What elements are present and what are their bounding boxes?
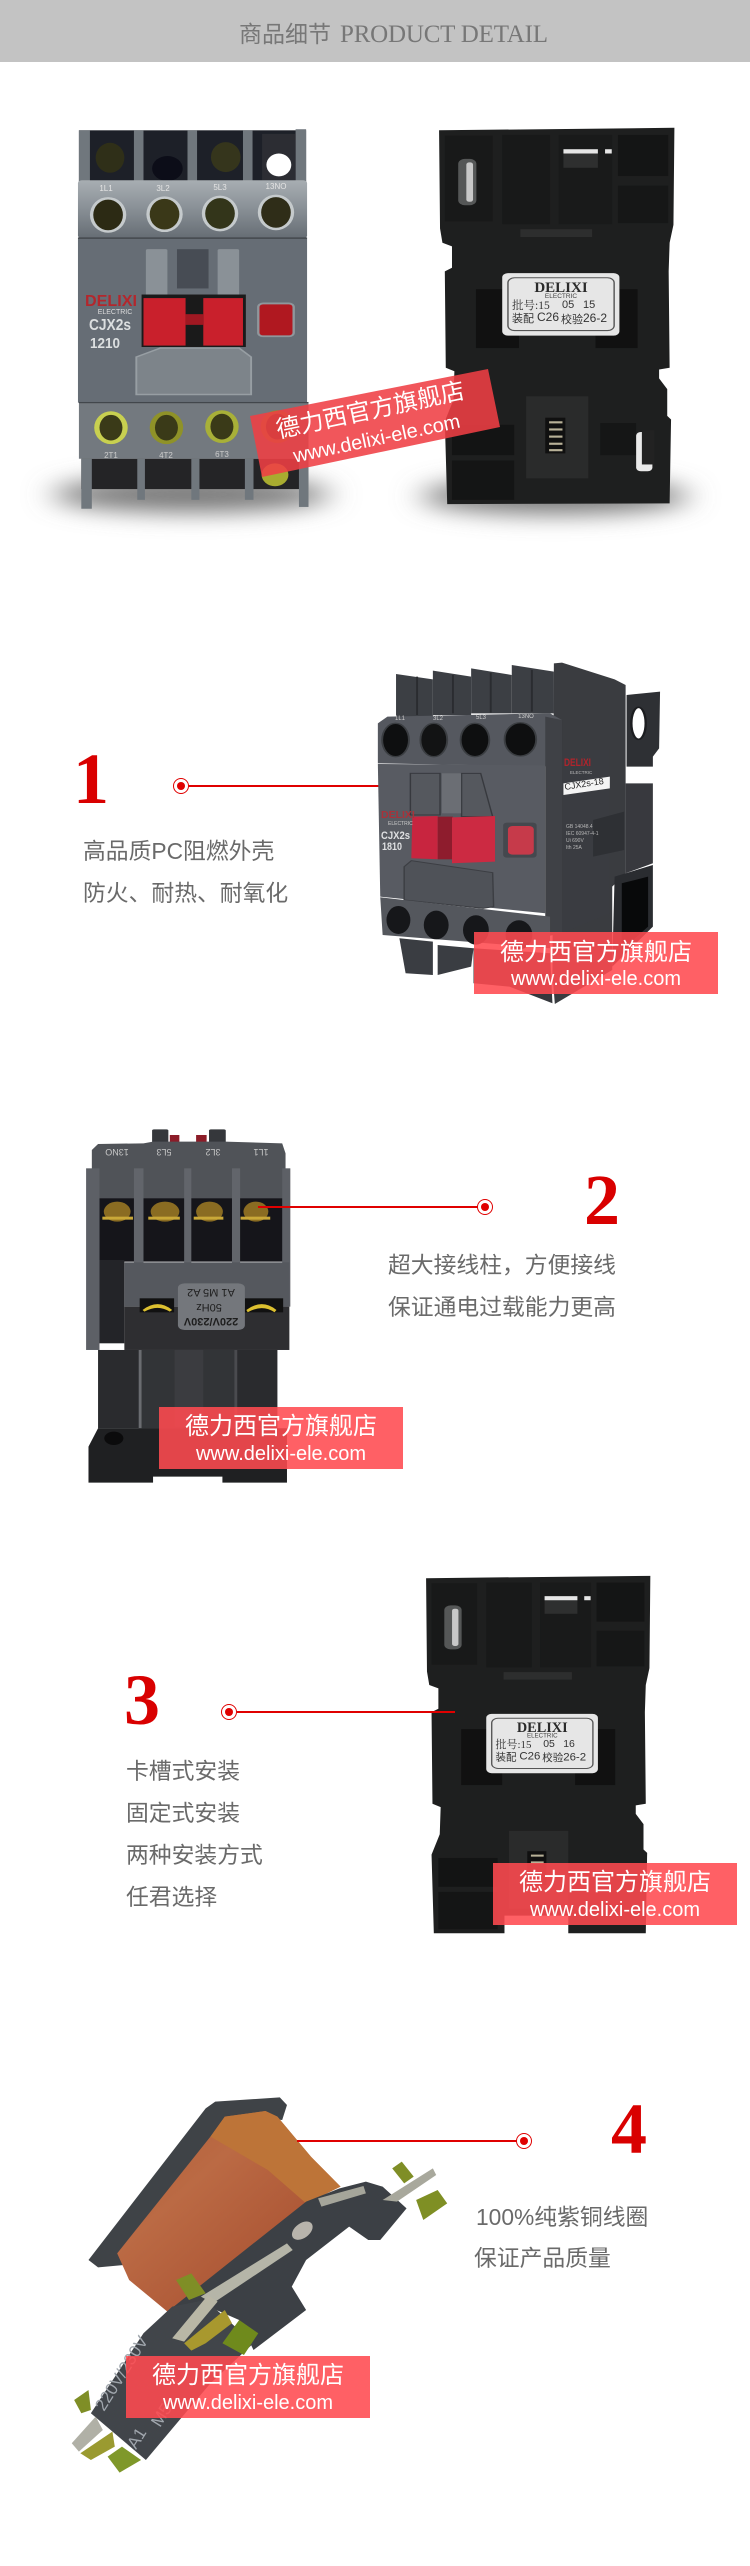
feature 3: description: 任君选择 [126, 1884, 217, 1910]
angled view markings: 13NO [518, 714, 534, 720]
rear label text: 校验 [561, 312, 583, 326]
mounting view label text: ELECTRIC [527, 1733, 558, 1739]
bobbin markings: A1 [123, 2424, 150, 2452]
feature 1: description: 高品质PC阻燃外壳 [83, 838, 274, 864]
feature 2: numeral: 2 [584, 1160, 620, 1240]
header band: 商品细节 [239, 21, 331, 47]
feature 2: description: 超大接线柱，方便接线 [388, 1252, 616, 1278]
watermark: store badge 2: www.delixi-ele.com [195, 1443, 366, 1465]
bobbin markings [91, 2332, 176, 2452]
front panel markings: 6T3 [215, 450, 229, 459]
product photo: contactor terminal view [86, 1129, 290, 1483]
product photo: contactor front view [53, 129, 330, 512]
rear label text: DELIXI [534, 280, 588, 296]
terminal view markings [105, 1147, 269, 1327]
rear label text: C26 [537, 310, 559, 324]
rear label text [512, 280, 607, 326]
header band: PRODUCT DETAIL [340, 21, 548, 48]
angled view markings [381, 714, 604, 853]
watermark: store badge 1: 德力西官方旗舰店 [500, 939, 692, 966]
terminal view markings: 1L1 [253, 1147, 269, 1157]
watermark: store badge 3: www.delixi-ele.com [529, 1899, 700, 1921]
angled view markings: ELECTRIC [570, 770, 593, 775]
terminal view markings: 220V/230V [183, 1315, 238, 1327]
mounting view label text [496, 1720, 586, 1764]
mounting view label text: 26-2 [563, 1751, 586, 1763]
terminal view markings: 5L3 [156, 1147, 172, 1157]
terminal view markings: 50Hz [196, 1301, 222, 1313]
feature 2: description [388, 1252, 616, 1320]
front panel markings: 1210 [90, 335, 120, 352]
angled view markings: DELIXI [564, 757, 591, 769]
rear label text: 26-2 [583, 311, 607, 325]
angled view markings: ELECTRIC [388, 821, 413, 827]
front panel markings: 3L2 [156, 184, 170, 193]
watermark: rotated store badge [250, 369, 500, 477]
terminal view markings: 3L2 [205, 1147, 221, 1157]
feature 1: numeral: 1 [73, 739, 109, 819]
product photo: copper coil [72, 2097, 447, 2473]
angled view markings: 5L3 [476, 715, 487, 721]
watermark: store badge 4: www.delixi-ele.com [162, 2392, 333, 2414]
mounting view label text: 校验 [542, 1751, 564, 1764]
feature 4: description [474, 2204, 648, 2271]
header band [0, 0, 750, 62]
watermark: store badge 2: 德力西官方旗舰店 [185, 1413, 377, 1440]
watermark: store badge 1 [474, 932, 718, 994]
feature 4: callout line [297, 2134, 532, 2148]
front panel markings: DELIXI [85, 293, 137, 310]
product photo: contactor angled view [378, 663, 660, 1004]
watermark: rotated store badge: 德力西官方旗舰店 [274, 377, 467, 444]
angled view markings: 1L1 [395, 716, 406, 722]
front panel markings [85, 182, 286, 460]
rear label text: 15 [583, 299, 595, 311]
rear label text: ELECTRIC [545, 293, 577, 300]
watermark: store badge 3: 德力西官方旗舰店 [519, 1869, 711, 1896]
front panel markings: 4T2 [159, 451, 173, 460]
mounting view label text: 16 [563, 1739, 575, 1750]
watermark: store badge 1: www.delixi-ele.com [510, 968, 681, 990]
front panel markings: 2T1 [104, 451, 118, 460]
feature 4: description: 保证产品质量 [474, 2245, 611, 2271]
bobbin markings: 220V/230V [91, 2332, 152, 2414]
angled view markings: 3L2 [433, 716, 444, 722]
angled view markings: Ith 25A [566, 845, 583, 851]
feature 1: description [83, 838, 288, 906]
mounting view label text: 批号:15 [496, 1737, 532, 1751]
terminal view markings: A1 M5 A2 [187, 1286, 235, 1298]
mounting view label text: C26 [519, 1750, 540, 1762]
front panel markings: 1L1 [99, 184, 113, 193]
product photo: contactor rear view, mounting [426, 1576, 650, 1933]
angled view markings: CJX2s-18 [564, 776, 604, 792]
feature 4: description: 100%纯紫铜线圈 [476, 2204, 648, 2230]
feature 3: description: 两种安装方式 [126, 1842, 263, 1868]
watermark: store badge 2 [159, 1407, 403, 1469]
terminal view markings: 13NO [105, 1147, 129, 1157]
feature 3: callout line [222, 1704, 455, 1720]
watermark: store badge 4: 德力西官方旗舰店 [152, 2362, 344, 2389]
product photo: contactor rear view [421, 128, 689, 514]
feature 3: description: 固定式安装 [126, 1800, 240, 1826]
watermark: store badge 3 [493, 1863, 737, 1925]
front panel markings: CJX2s [89, 317, 131, 334]
angled view markings: IEC 60947-4-1 [566, 831, 599, 837]
angled view markings: Ui 690V [566, 838, 584, 844]
mounting view label text: DELIXI [517, 1720, 568, 1736]
feature 1: description: 防火、耐热、耐氧化 [83, 880, 288, 906]
feature 2: callout line [258, 1200, 492, 1214]
feature 4: numeral: 4 [611, 2089, 647, 2169]
watermark: store badge 4 [126, 2356, 370, 2418]
front panel markings: 13NO [266, 182, 286, 191]
front panel markings: ELECTRIC [98, 309, 132, 316]
angled view markings: CJX2s [381, 830, 410, 842]
rear label text: 批号:15 [512, 298, 550, 312]
angled view markings: 1810 [382, 841, 402, 853]
feature 3: numeral: 3 [124, 1660, 160, 1740]
angled view markings: DELIXI [381, 809, 415, 821]
feature 1: callout line [174, 778, 408, 794]
mounting view label text: 05 [543, 1739, 555, 1750]
feature 3: description: 卡槽式安装 [126, 1758, 240, 1784]
angled view markings: GB 14048.4 [566, 824, 593, 830]
watermark: rotated store badge: www.delixi-ele.com [290, 411, 462, 468]
bobbin markings: M5 [147, 2400, 176, 2430]
feature 2: description: 保证通电过载能力更高 [388, 1294, 616, 1320]
rear label text: 装配 [512, 312, 534, 325]
rear label text: 05 [562, 299, 574, 311]
front panel markings: 5L3 [213, 183, 227, 192]
feature 3: description [126, 1758, 263, 1910]
mounting view label text: 装配 [496, 1750, 517, 1763]
